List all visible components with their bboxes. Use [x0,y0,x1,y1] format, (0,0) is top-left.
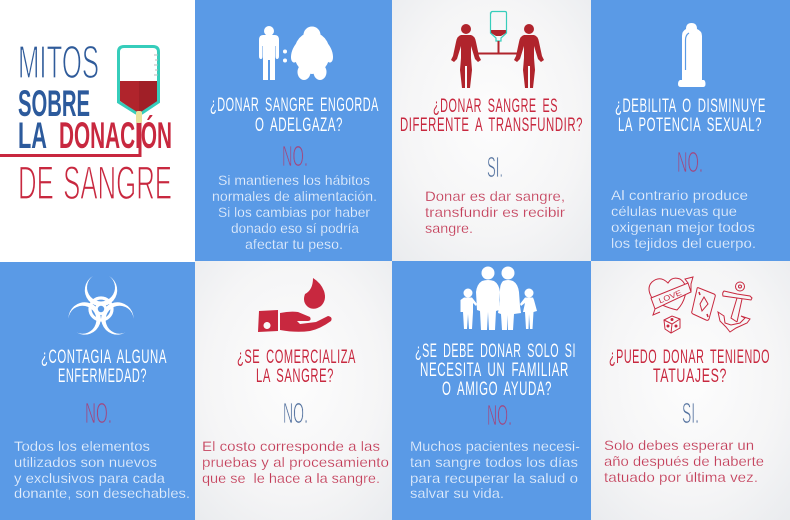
question: ¿SE DEBE DONAR SOLO SI [415,340,576,362]
body text: para recuperar la salud o [410,470,578,486]
title: sobre: SOBRE [18,83,90,124]
panel: potencia [591,0,790,261]
body text: Solo debes esperar un [604,437,754,453]
panel: tatuajes [591,261,790,520]
body text: pruebas y al procesamiento [202,454,389,470]
question [41,346,167,387]
question [615,95,766,136]
body text: Si los cambias por haber [218,204,370,220]
question: O AMIGO AYUDA? [442,378,552,400]
body text: Muchos pacientes necesi- [410,438,580,454]
father [476,280,500,330]
body text: Donar es dar sangre, [425,188,565,204]
body text: tan sangre todos los días [410,454,578,470]
panel: transfundir [392,0,591,261]
body text [202,438,389,486]
icon: family [460,266,537,330]
answer: NO. [85,398,112,430]
icon: transfusion [451,12,544,88]
body text [604,437,764,485]
body text: que se le hace a la sangre. [202,470,380,486]
body text: Si mantienes los hábitos [218,172,370,188]
panel: familiar: NO. [487,400,512,432]
icon: playing card [692,288,715,320]
body text: año después de haberte [604,453,764,469]
title: mitos: MITOS [18,36,99,88]
icon: heart with banner: LOVE [657,288,683,305]
question: O ADELGAZA? [255,114,343,136]
body text: y exclusivos para cada [14,470,165,486]
body text: transfundir es recibir [425,204,565,220]
panel: title [0,0,195,261]
body text [425,188,565,236]
answer: NO. [282,141,308,173]
question [210,94,379,136]
icon: anchor [718,282,752,332]
panel: contagia [0,262,195,520]
panel: engorda [195,0,392,261]
body text: salvar su vida. [410,485,504,501]
question: ENFERMEDAD? [58,365,147,387]
body text: afectar tu peso. [245,236,343,252]
answer: NO. [677,147,703,179]
icon: biohazard [64,276,138,340]
icon: hand with blood drop [258,278,332,332]
body text: normales de alimentación. [212,188,377,204]
title: de sangre: DE SANGRE [18,156,172,209]
question: ¿CONTAGIA ALGUNA [41,346,167,368]
question: DIFERENTE A TRANSFUNDIR? [400,114,583,136]
question: ¿DONAR SANGRE ENGORDA [210,94,379,116]
question [237,346,356,387]
son [460,298,477,329]
icon: tattoos [649,277,752,333]
panel: comercializa: NO. [283,398,308,430]
icon: dice [664,316,680,333]
title: la: LA [18,115,47,156]
body text: utilizados son nuevos [14,454,157,470]
question [609,346,770,387]
mother [498,280,521,330]
body text: Todos los elementos [14,438,150,454]
question: NECESITA UN FAMILIAR [420,359,569,381]
body text: sangre. [425,220,473,236]
body text: El costo corresponde a las [202,438,380,454]
panel: comercializa [195,261,392,520]
body text [14,438,190,501]
panel: tatuajes: SI. [682,398,699,430]
question [400,95,583,136]
icon: thin and obese figures [259,26,335,80]
panel: familiar [392,261,591,520]
body text: oxigenan mejor todos [611,219,755,235]
body text [410,438,580,501]
red tube line [0,118,140,156]
body text [212,172,377,252]
title: donacion: DONACIÓN [59,114,172,156]
body text: tatuado por última vez. [604,469,758,485]
icon: blood bag [118,46,158,123]
question [415,340,576,400]
question: ¿SE COMERCIALIZA [237,346,356,368]
body text: donado eso sí podría [231,220,359,236]
body text: Al contrario produce [611,187,748,203]
body text: los tejidos del cuerpo. [611,235,756,251]
icon: condom [678,23,706,87]
body text: células nuevas que [611,203,737,219]
panel: transfundir: SI. [487,152,503,184]
question: ¿DONAR SANGRE ES [433,95,558,117]
body text [611,187,756,251]
question: LA SANGRE? [256,365,334,387]
question: TATUAJES? [653,365,727,387]
body text: donante, son desechables. [14,485,190,501]
